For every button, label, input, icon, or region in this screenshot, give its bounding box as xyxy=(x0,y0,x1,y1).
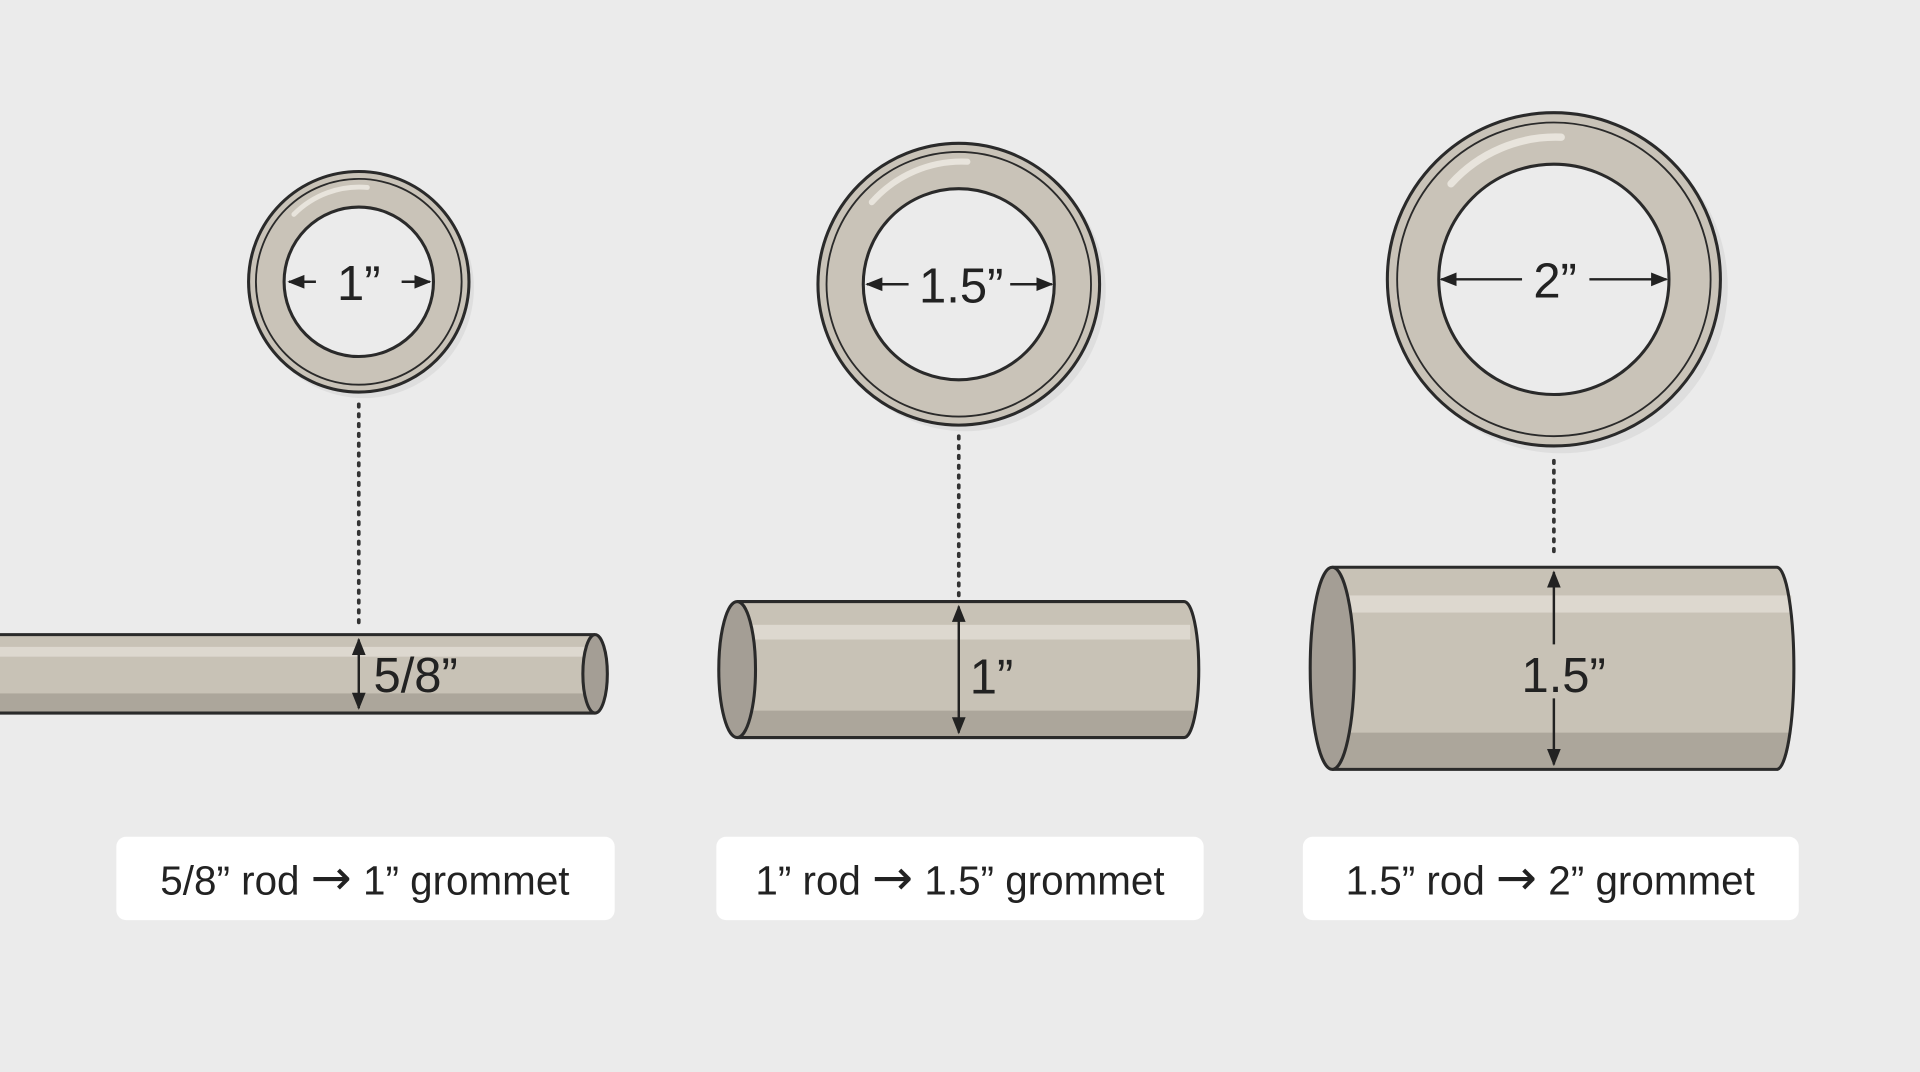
rod 1: 5/8” xyxy=(373,649,458,703)
rod 3: 1.5” xyxy=(1521,649,1606,703)
connector lines xyxy=(359,404,1554,627)
grommet 2 xyxy=(818,143,1106,431)
label 2: 1” rod → 1.5” grommet xyxy=(755,849,1165,906)
rod 1 xyxy=(0,635,607,713)
rod 2 xyxy=(719,602,1199,738)
label 1 xyxy=(116,837,615,920)
grommet 2: 1.5” xyxy=(919,260,1003,314)
label 3 xyxy=(1303,837,1799,920)
rod 2: 1” xyxy=(970,650,1013,704)
grommet 3 xyxy=(1387,113,1728,453)
label 3: 1.5” rod → 2” grommet xyxy=(1346,849,1755,906)
grommet 1: 1” xyxy=(337,257,381,311)
label 2 xyxy=(716,837,1204,920)
rod 3 xyxy=(1310,567,1794,770)
label 1: 5/8” rod → 1” grommet xyxy=(160,849,570,906)
grommet 3: 2” xyxy=(1533,255,1577,309)
grommet 1 xyxy=(249,172,474,398)
